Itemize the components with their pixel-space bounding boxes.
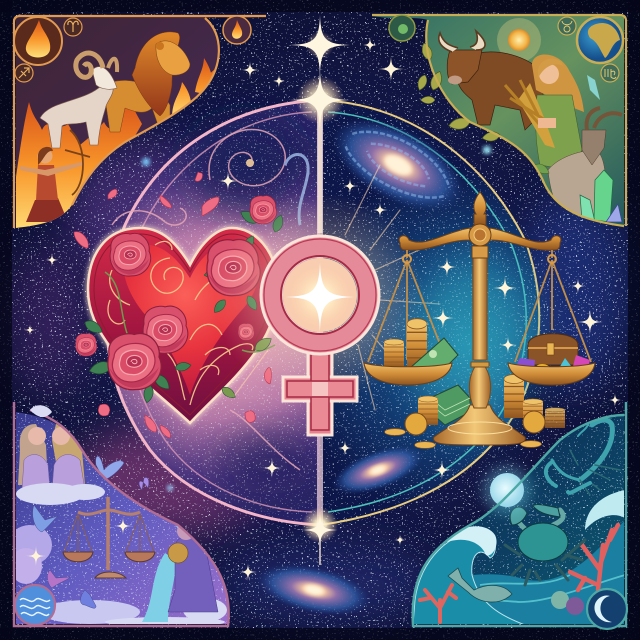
frame: mauve (14, 402, 229, 626)
right pan (508, 363, 595, 385)
sea (413, 520, 625, 625)
teal glow behind the scale (415, 250, 535, 430)
panel: air signs, bottom left (8, 402, 231, 627)
sparkles: stars across the sky (24, 37, 622, 581)
roses on heart (76, 196, 285, 404)
emblem: globe (577, 17, 623, 63)
left pan chains (368, 250, 447, 362)
bull (439, 31, 545, 130)
dove cloud (30, 405, 52, 417)
right half: wealth (323, 102, 538, 520)
heart gold filigree (108, 241, 253, 405)
butterflies (33, 456, 149, 608)
emblem: crescent moon (587, 589, 627, 629)
emblem: taurus sign (558, 17, 576, 35)
panel: earth signs, top right (372, 15, 626, 226)
sun (497, 18, 541, 62)
emblem: sagittarius sign (15, 64, 33, 82)
scale base (433, 405, 525, 445)
lion (106, 32, 190, 132)
goat (548, 108, 622, 222)
coral right (570, 525, 618, 590)
coral left (420, 585, 456, 622)
emblem: small flame circle (223, 16, 251, 44)
ground money and coins (385, 374, 565, 448)
emblem: green charm (389, 15, 415, 41)
water stream (142, 553, 176, 622)
balance scale with coins and treasure (364, 192, 595, 448)
moon (483, 466, 531, 514)
galaxy: bottom spiral (252, 555, 376, 625)
frame: orange (14, 16, 266, 228)
panel: central disc halves (100, 100, 560, 530)
emblem: aries sign (64, 18, 82, 36)
emblem: fire circle (14, 17, 62, 65)
top star flare (290, 15, 350, 130)
large wave (414, 540, 524, 624)
scorpion (546, 418, 620, 495)
emblem: aquarius (15, 585, 55, 625)
flames (16, 102, 142, 228)
archer (20, 130, 90, 222)
clouds (8, 483, 227, 627)
Venus symbol (264, 110, 376, 435)
galaxy: upper right spiral (318, 99, 478, 231)
swirls: decorative left spirals (112, 130, 308, 470)
Venus glow rays (215, 165, 440, 410)
fish (448, 568, 512, 602)
galaxy: lower middle spiral (326, 436, 430, 504)
frame: gold green (372, 15, 626, 226)
crab (505, 505, 585, 585)
panel: fire signs, top left (10, 16, 266, 234)
panel: water signs, bottom right (413, 402, 628, 629)
left pan content (384, 319, 458, 368)
water bearer (168, 520, 218, 612)
crystals (580, 75, 622, 222)
emblem: virgo sign (601, 64, 619, 82)
right wave (585, 490, 625, 530)
heart inner red (124, 242, 259, 395)
left pan (364, 363, 452, 385)
ram (40, 53, 117, 148)
bottom star flare (302, 507, 338, 548)
arcs: outline of the disc (106, 100, 539, 565)
petals: scattered rose petals (74, 172, 271, 438)
scale of Libra (63, 497, 155, 578)
earth goddess (505, 55, 584, 170)
heart with roses (76, 196, 285, 423)
scale pole (473, 255, 487, 360)
vine frame leaves (416, 42, 551, 177)
twins (18, 424, 85, 490)
sea plants (551, 591, 584, 615)
frame: teal (413, 402, 626, 626)
scale beam (399, 228, 561, 250)
vine on heart (105, 272, 275, 352)
right pan content: treasure chest and gems (514, 334, 590, 370)
right pan chains (515, 250, 591, 362)
left half: love (119, 91, 320, 523)
